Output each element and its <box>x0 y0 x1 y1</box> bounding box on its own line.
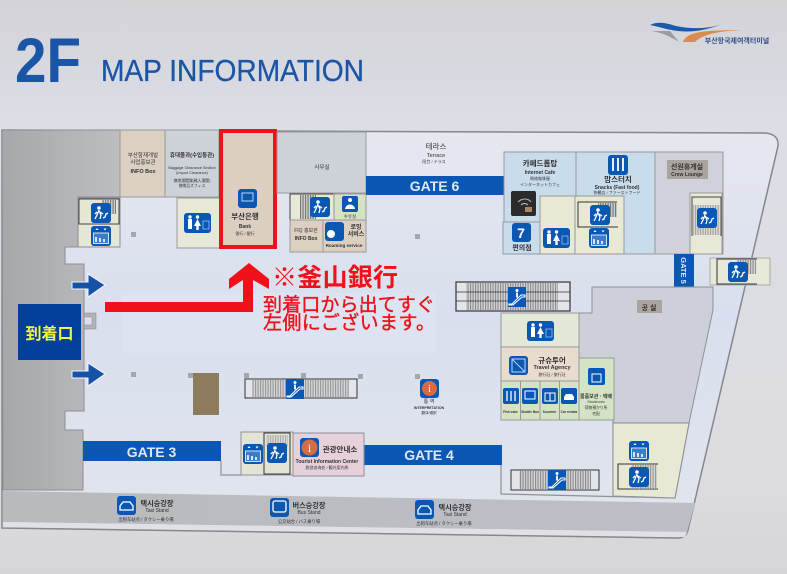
gate 3 band <box>83 441 221 461</box>
panel: bank highlighted in red <box>221 131 275 247</box>
panel: roaming service: Roaming service <box>326 243 363 248</box>
panel: stairs and nursery block: 수유실 <box>344 213 356 220</box>
panel: internet cafe: 카페드롭탑 <box>523 158 557 168</box>
panel: tourist information center: 旅游咨询处 / 観光案内所 <box>305 464 349 470</box>
panel: convenience store: 7 <box>517 225 525 241</box>
panel: crew stairs <box>690 193 722 254</box>
panel: lift and stairs beside gate 3 <box>221 432 293 475</box>
arrow: upper entrance <box>72 274 105 297</box>
left stair and lift cell <box>78 198 120 247</box>
panel: info box: 사업홍보관 <box>130 158 156 166</box>
panel: info box: INFO Box <box>130 169 156 175</box>
panel: stairs and nursery block <box>290 194 366 220</box>
stand: taxi left: 出租车站点 / タクシー乗り場 <box>118 516 174 523</box>
panel: FIQ info box: INFO Box <box>295 236 318 242</box>
panel: four small service cells: Fish cake <box>503 410 518 414</box>
information point: INTERPRETATION <box>414 406 445 410</box>
panel: internet cafe: インターネットカフェ <box>520 181 560 187</box>
panel: roaming service: 서비스 <box>348 230 365 238</box>
panel: internet cafe: 网络咖啡屋 <box>530 175 550 181</box>
stand: taxi right: 出租车站点 / タクシー乗り場 <box>416 520 472 527</box>
panel: crew lounge <box>655 152 723 254</box>
highlight behind annotation <box>122 293 436 353</box>
panel: crew lounge: 선원휴게실 <box>671 162 703 171</box>
gate 4 band: GATE 4 <box>404 447 454 463</box>
panel: travel agency <box>501 347 579 381</box>
panel: four small service cells: Souvenir <box>543 410 557 414</box>
title: map information: MAP INFORMATION <box>101 53 364 88</box>
panel: four small service cells: Shuttle Bus <box>521 410 539 414</box>
stand: bus <box>270 498 326 525</box>
panel: stockroom: Stockroom <box>587 400 605 404</box>
annotation heading: ※釜山銀行 <box>272 264 398 292</box>
panel: roaming service <box>323 220 366 252</box>
stand: taxi left: Taxi Stand <box>145 508 169 514</box>
panel: office: 사무실 <box>314 163 330 171</box>
terrace label: 阳台 / テラス <box>422 158 446 164</box>
information point: i <box>428 384 431 395</box>
gate 5 band <box>674 254 694 287</box>
arrival label: 到着口 <box>25 324 74 343</box>
panel: travel agency: Travel Agency <box>533 365 571 371</box>
panel: stockroom: 물품보관 · 택배 <box>580 393 612 400</box>
panel: four small service cells <box>501 381 579 420</box>
terrace label <box>422 142 446 164</box>
small door mark <box>84 313 96 329</box>
stand: taxi right <box>415 500 472 527</box>
arrival label <box>18 304 81 360</box>
panel: snacks: 맘스터치 <box>604 174 632 184</box>
panel: bank highlighted in red: Bank <box>239 224 251 230</box>
logo: Busan port international passenger terminal: 부산항국제여객터미널 <box>705 36 769 45</box>
red route arrow <box>105 263 269 312</box>
panel: four small service cells: Car rentals <box>561 410 578 414</box>
panel: internet cafe <box>504 152 576 222</box>
title: floor number: 2F <box>15 26 81 96</box>
panel: FIQ info box <box>290 220 323 252</box>
annotation line two: 左側にございます。 <box>263 311 435 334</box>
stand: bus: 公交站台 / バス乗り場 <box>278 518 321 525</box>
arrow: lower entrance <box>72 363 105 386</box>
gate 5 band: GATE 5 <box>679 257 688 284</box>
panel: toilet east <box>501 313 579 347</box>
panel: convenience store <box>503 222 540 254</box>
gate 3 band: GATE 3 <box>127 444 176 460</box>
panel: baggage clearance <box>165 130 219 197</box>
panel: tourist information center <box>293 433 364 476</box>
panel: baggage clearance: 휴대물과(수입통관) <box>170 151 214 159</box>
panel: snacks: Snacks (Fast food) <box>595 185 640 191</box>
panel: internet cafe: Internet Cafe <box>525 170 555 176</box>
panel: info box: 부산항재개발 <box>128 151 158 159</box>
panel: vacant room <box>579 287 713 423</box>
logo: Busan port international passenger terminal <box>650 23 769 45</box>
panel: bank highlighted in red: 부산은행 <box>231 211 259 221</box>
panel: snacks <box>576 152 655 254</box>
panel: snacks: 快餐店 / ファーストフード <box>593 189 641 195</box>
panel: baggage clearance: Baggage Clearance Section <box>168 166 216 170</box>
information point: 翻译/通訳 <box>422 410 437 415</box>
panel: right stairs <box>710 258 770 285</box>
stand: taxi left: 택시승강장 <box>140 499 174 508</box>
panel: tourist information center: i <box>308 441 312 455</box>
panel: travel agency: 旅行社 / 旅行社 <box>538 371 566 377</box>
panel: tourist information center: Tourist Information Center <box>296 459 358 465</box>
pillars <box>131 232 420 379</box>
panel: roaming service: 로밍 <box>350 223 362 231</box>
panel: info box <box>120 130 165 197</box>
panel: convenience store: 편의점 <box>512 243 532 252</box>
annotation line one: 到着口から出てすぐ <box>263 294 435 316</box>
stand: taxi left <box>117 496 174 523</box>
panel: baggage clearance: 携帯品オフィス <box>179 183 205 188</box>
panel: stockroom <box>579 358 614 420</box>
stand: bus: 버스승강장 <box>292 501 326 510</box>
stand: taxi right: 택시승강장 <box>438 503 472 512</box>
panel: FIQ info box: FIQ 홍보관 <box>294 227 318 234</box>
panel: stockroom: 荷物預かり所 <box>585 405 608 410</box>
left gray block <box>2 130 120 490</box>
panel: office <box>277 132 366 193</box>
panel: stockroom: 宅配 <box>592 411 600 416</box>
gate 6 band: GATE 6 <box>410 178 459 194</box>
panel: crew lounge: Crew Lounge <box>671 172 703 178</box>
panel: travel agency: 규슈투어 <box>538 355 566 365</box>
terrace label: 테라스 <box>426 142 446 151</box>
panel: toilet cell <box>177 198 220 248</box>
information point <box>414 379 445 415</box>
information point: 통 역 <box>424 398 434 405</box>
escalator: middle <box>245 379 357 399</box>
stand: bus: Bus Stand <box>297 510 321 516</box>
floor plan outline <box>2 130 778 538</box>
panel: bank highlighted in red: 银行 / 銀行 <box>235 230 255 236</box>
gate 4 band <box>364 445 502 465</box>
brown block <box>193 373 219 415</box>
escalator: lower right <box>511 470 599 490</box>
stand: taxi right: Taxi Stand <box>443 512 467 518</box>
panel: toilet and stairs block <box>540 196 624 254</box>
panel: baggage clearance: 携帯通関課(輸入通関) <box>174 178 211 183</box>
panel: tourist information center: 관광안내소 <box>323 444 357 454</box>
panel: vacant room: 공 실 <box>642 303 656 312</box>
road strip: taxi and bus stands <box>3 491 695 537</box>
terrace label: Terrace <box>427 153 445 159</box>
escalator: upper <box>456 282 570 311</box>
gate 6 band <box>366 176 504 195</box>
panel: baggage clearance: (Import Clearance) <box>176 171 209 175</box>
panel: southeast lift and stairs <box>501 423 689 498</box>
